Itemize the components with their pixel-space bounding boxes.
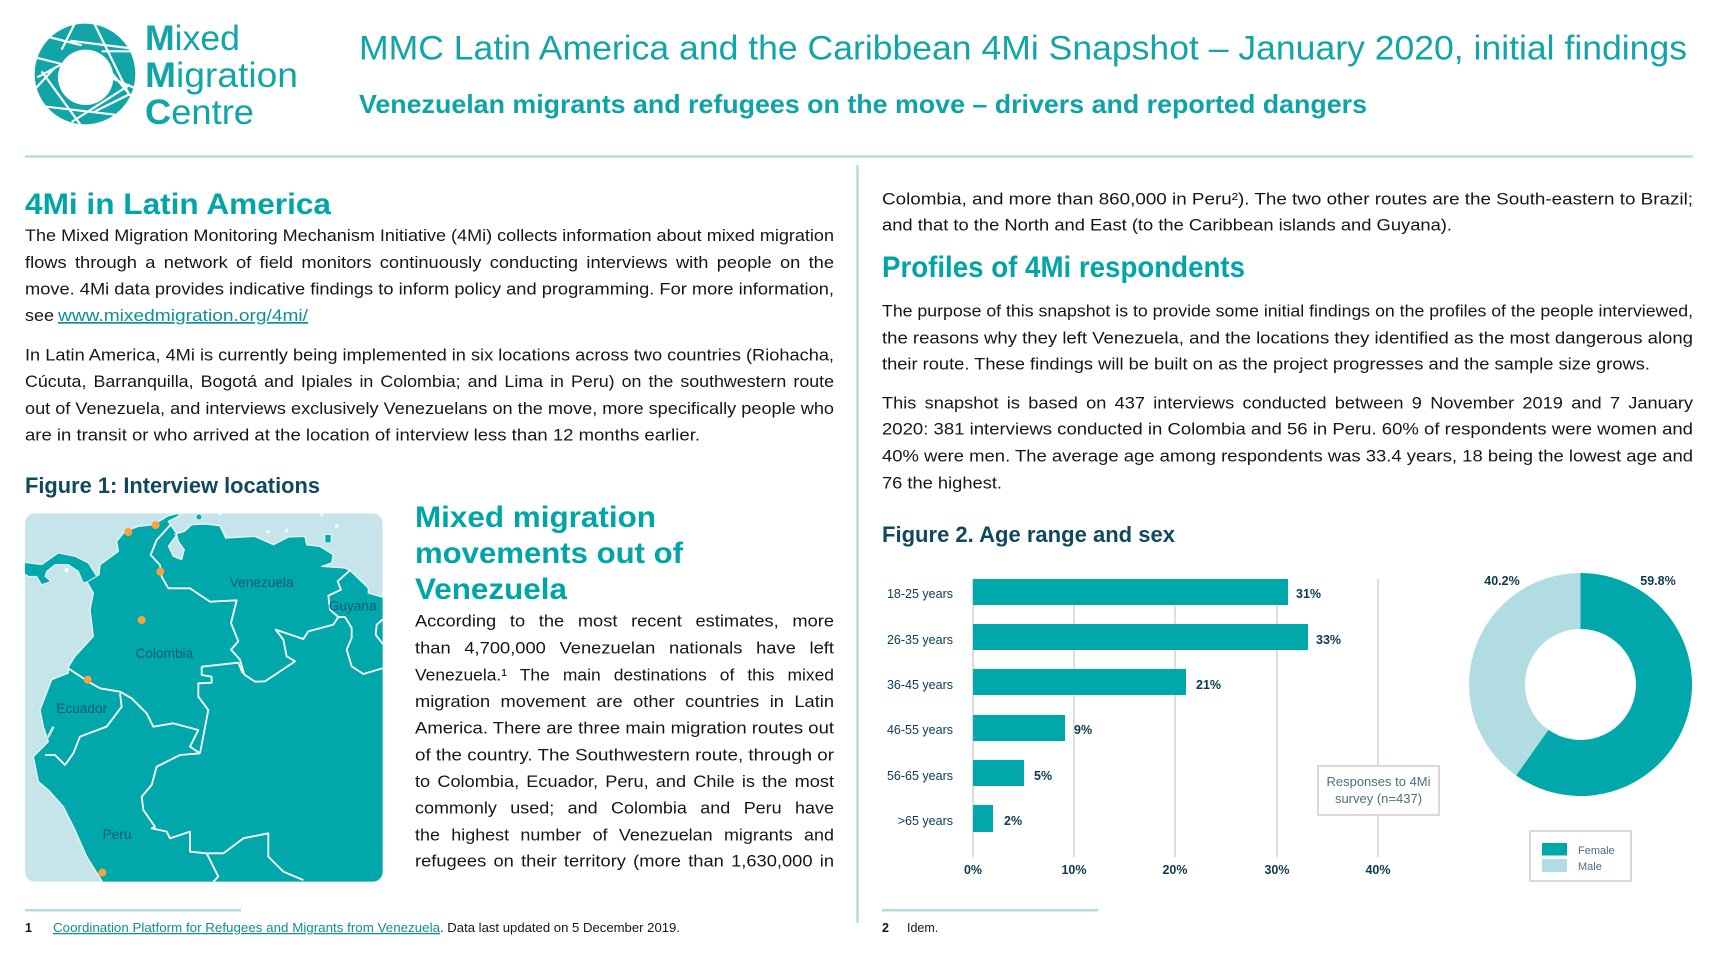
right column intro text: Colombia, and more than 860,000 in Peru²). The two other routes are the South-eastern to Brazil; [882,190,1693,208]
map: interview locations [23,513,385,883]
paragraph: implementation [25,346,834,444]
logo wordmark: Centre [145,93,254,132]
paragraph: routes [415,612,834,870]
heading: Profiles of 4Mi respondents [882,251,1245,284]
heading: 4Mi in Latin America [25,188,331,221]
axis labels [964,863,1391,877]
heading: Figure 1: Figure 1: Interview locations [25,473,320,498]
paragraph: routes: Venezuela.¹ The main destinations of this mixed [415,666,834,684]
paragraph: routes: refugees on their territory (more than 1,630,000 in [415,852,834,870]
map labels: countries [56,575,377,842]
logo wordmark [145,19,298,132]
icon: logo ring [35,23,136,126]
category labels: 56-65 years [887,769,953,783]
axis labels: 40% [1365,863,1391,877]
right column intro text: and that to the North and East (to the Caribbean islands and Guyana). [882,216,1452,234]
logo wordmark: Migration [145,56,298,95]
paragraph: about 4Mi: The Mixed Migration Monitoring Mechanism Initiative (4Mi) collects information about mixed migration [25,226,834,245]
paragraph: sample: 76 the highest. [882,474,1002,492]
paragraph: purpose: the reasons why they left Venezuela, and the locations they identified as the most dangerous along [882,328,1693,348]
callout: responses: survey (n=437) [1335,791,1422,806]
callout: responses [1318,766,1439,815]
section: 4Mi in Latin America [25,188,834,444]
paragraph: sample [882,394,1694,492]
category labels [887,587,953,828]
segment: male [1469,573,1580,776]
label: male share: 40.2% [1484,574,1520,588]
paragraph: routes: According to the most recent estimates, more [415,612,834,630]
footnote 1: . Data last updated on 5 December 2019. [440,921,680,935]
paragraph: implementation: Cúcuta, Barranquilla, Bogotá and Ipiales in Colombia; and Lima in Peru) on the southwestern route [25,372,834,391]
paragraph: routes: than 4,700,000 Venezuelan nationals have left [415,638,834,658]
value labels: 31% [1296,587,1321,601]
bar chart: age range [887,579,1439,877]
paragraph: about 4Mi [25,226,834,325]
heading: movements out of [415,537,684,570]
category labels: >65 years [898,814,953,828]
value labels: 5% [1034,769,1052,783]
title: MMC Latin America and the Caribbean 4Mi Snapshot – January 2020, initial findings [359,30,1687,68]
paragraph: purpose: The purpose of this snapshot is to provide some initial findings on the profiles of the people interviewed, [882,302,1693,320]
value labels: 21% [1196,678,1221,692]
map markers: interview locations [84,521,164,877]
footnote 2: 2 [882,921,889,935]
heading: Venezuela [415,573,567,606]
donut chart: sex [1469,573,1692,796]
footnote 1 [25,909,680,935]
paragraph: sample: 40% were men. The average age among respondents was 33.4 years, 18 being the lowest age and [882,446,1693,466]
footnote 2 [882,909,1098,935]
map labels: countries: Guyana [329,598,377,613]
heading: Figure 2: Figure 2. Age range and sex [882,522,1176,547]
label: female share: 59.8% [1640,574,1676,588]
category labels: 26-35 years [887,633,953,647]
footnote 2: Idem. [907,921,938,935]
axis labels: 20% [1162,863,1188,877]
axis labels: 10% [1061,863,1087,877]
paragraph: sample: 2020: 381 interviews conducted in Colombia and 56 in Peru. 60% of respondents were women and [882,420,1693,438]
paragraph: purpose [882,302,1693,374]
paragraph: routes: to Colombia, Ecuador, Peru, and Chile is the most [415,772,834,791]
heading [415,501,684,606]
heading: Mixed migration [415,501,656,534]
footnote 1: Coordination Platform for Refugees and Migrants from Venezuela [53,921,440,935]
category labels: 36-45 years [887,678,953,692]
paragraph: routes: commonly used; and Colombia and Peru have [415,798,834,818]
paragraph: routes: America. There are three main migration routes out [415,718,834,738]
paragraph: about 4Mi: flows through a network of field monitors continuously conducting interviews with people on the [25,253,834,272]
legend: Female [1578,845,1615,857]
value labels: 2% [1004,814,1022,828]
paragraph: implementation: In Latin America, 4Mi is currently being implemented in six locations across two countries (Riohacha, [25,346,834,364]
map labels: countries: Ecuador [56,701,108,716]
legend [1530,831,1631,881]
right column intro text [882,190,1693,234]
subtitle: Venezuelan migrants and refugees on the move – drivers and reported dangers [359,89,1367,119]
paragraph: about 4Mi: move. 4Mi data provides indicative findings to inform policy and programming. For more information, [25,280,834,298]
paragraph: about 4Mi: see [25,306,54,325]
value labels: 33% [1316,633,1341,647]
map labels: countries: Peru [103,827,131,842]
footnote 1: 1 [25,921,32,935]
paragraph: routes: the highest number of Venezuelan migrants and [415,826,834,844]
paragraph: about 4Mi: www.mixedmigration.org/4mi/ [57,306,308,325]
paragraph: purpose: their route. These findings will be built on as the project progresses and the sample size grows. [882,354,1650,374]
category labels: 46-55 years [887,723,953,737]
paragraph: sample: This snapshot is based on 437 interviews conducted between 9 November 2019 and 7 January [882,394,1694,412]
value labels: 9% [1074,723,1092,737]
segment: female [1516,573,1692,796]
header [35,19,1687,132]
legend: Male [1578,861,1602,873]
axis labels: 30% [1264,863,1290,877]
logo: Mixed Migration Centre [35,19,298,132]
bars [973,579,1308,832]
paragraph: routes: migration movement are other countries in Latin [415,692,834,711]
paragraph: implementation: are in transit or who arrived at the location of interview less than 12 months earlier. [25,426,700,444]
paragraph: routes: of the country. The Southwestern route, through or [415,746,834,764]
logo wordmark: Mixed [145,19,240,58]
section: Mixed migration movements [415,501,834,870]
map labels: countries: Colombia [135,646,194,661]
category labels: 18-25 years [887,587,953,601]
axis labels: 0% [964,863,982,877]
paragraph: implementation: out of Venezuela, and interviews exclusively Venezuelans on the move, more specifically people who [25,399,834,418]
map labels: countries: Venezuela [230,575,294,590]
callout: responses: Responses to 4Mi [1326,774,1431,789]
section: Profiles of 4Mi respondents [882,251,1694,492]
value labels [1004,587,1341,828]
